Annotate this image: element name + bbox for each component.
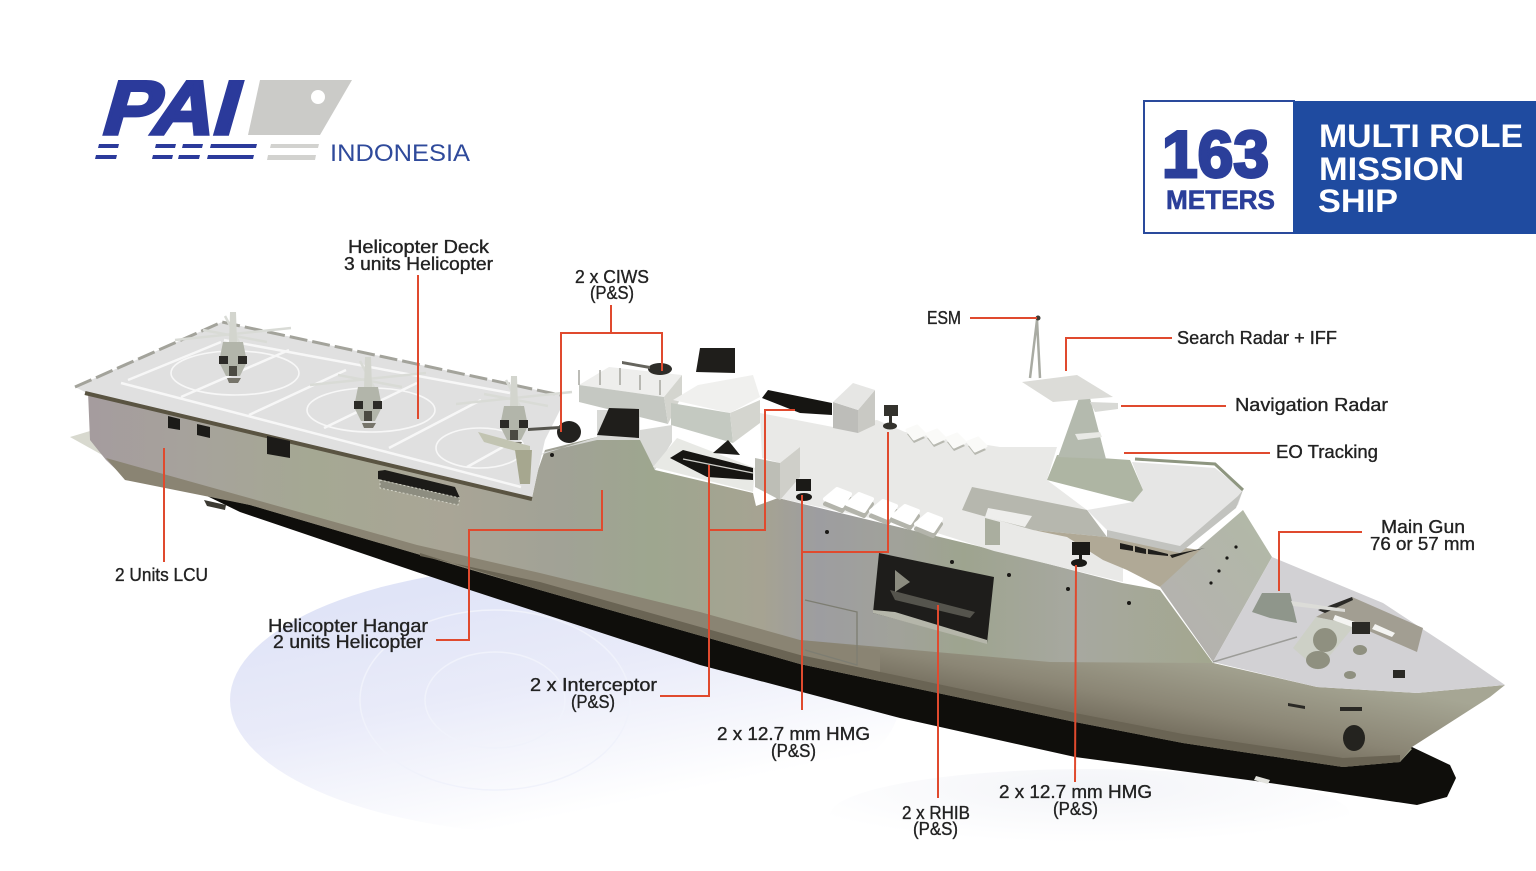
- logo: PAI Indonesia: INDONESIA: [330, 140, 471, 167]
- CIWS block: [579, 367, 682, 424]
- dark director box lower: [597, 408, 639, 438]
- radar mast tower: [1022, 316, 1118, 459]
- callout: helicopter deck: [344, 237, 493, 419]
- main upper deck: [760, 413, 1123, 582]
- callout: CIWS: (P&S): [590, 283, 634, 303]
- callout: HMG forward: 2 x 12.7 mm HMG: [999, 782, 1152, 802]
- callout: ESM: [927, 308, 1037, 328]
- callout: LCU: 2 Units LCU: [115, 565, 208, 585]
- background glow beneath ship: [230, 565, 1350, 861]
- boat row side: [825, 489, 941, 536]
- aft superstructure base: [540, 410, 672, 470]
- callout: LCU: [115, 448, 208, 585]
- dark strip above waterline: [420, 553, 1400, 767]
- helicopter 2: [310, 357, 426, 428]
- gray tower block: [833, 383, 875, 433]
- callout: HMG aft: [717, 432, 888, 761]
- HMG mount aft: [796, 479, 812, 501]
- callout: HMG aft: (P&S): [771, 741, 816, 761]
- callout: helicopter hangar: [268, 490, 602, 652]
- RHIB bay: [873, 553, 994, 644]
- badge: 163 meters, multi role mission ship: METERS: [1166, 185, 1275, 215]
- badge: 163 meters, multi role mission ship: 163: [1162, 117, 1269, 191]
- callout: CIWS: 2 x CIWS: [575, 267, 649, 287]
- bridge deck: [1087, 459, 1243, 558]
- HMG mount forward: [1071, 542, 1090, 567]
- boat row rear: [907, 426, 986, 455]
- logo: PAI Indonesia: [94, 66, 471, 167]
- aft windows: [168, 416, 290, 458]
- callout: main gun: 76 or 57 mm: [1370, 534, 1475, 554]
- stern ramp: [70, 428, 104, 456]
- forward hangar block: [671, 375, 760, 443]
- callout: navigation radar: Navigation Radar: [1235, 395, 1388, 415]
- foredeck anchor well: [1293, 597, 1423, 679]
- callout: helicopter hangar: 2 units Helicopter: [273, 632, 423, 652]
- lower hull band: [106, 458, 880, 681]
- helicopter 3: [456, 376, 572, 484]
- callout: interceptor: 2 x Interceptor: [530, 675, 657, 695]
- side door: [805, 600, 857, 665]
- interceptor bay: [653, 438, 755, 492]
- callout: search radar: [1066, 328, 1337, 371]
- CIWS forward mount: [622, 361, 672, 375]
- HMG mount mid deck: [883, 405, 898, 430]
- bridge lower block: [1047, 455, 1143, 502]
- logo: PAI Indonesia: PAI: [94, 66, 252, 151]
- callout: EO tracking: EO Tracking: [1276, 442, 1378, 462]
- badge: 163 meters, multi role mission ship: MISSION: [1319, 151, 1464, 187]
- callout: helicopter hangar: Helicopter Hangar: [268, 616, 428, 636]
- tall dark director box: [696, 348, 735, 373]
- hull side: [88, 392, 1412, 767]
- callout: main gun: [1279, 517, 1475, 591]
- forward lower hull: [800, 640, 1505, 767]
- forward flare panel: [1160, 510, 1272, 662]
- main gun: [1252, 593, 1345, 623]
- badge: 163 meters, multi role mission ship: [1144, 101, 1536, 234]
- interceptor starboard: [762, 390, 832, 415]
- callout: RHIB: 2 x RHIB: [902, 803, 970, 823]
- interceptor port: [670, 440, 753, 480]
- badge: 163 meters, multi role mission ship: SHIP: [1318, 183, 1398, 219]
- hull portholes: [550, 453, 1238, 605]
- aft underwater fitting: [204, 500, 226, 510]
- callout: helicopter deck: Helicopter Deck: [348, 237, 490, 257]
- helicopter 1: [175, 312, 291, 383]
- callout: HMG forward: (P&S): [1053, 799, 1098, 819]
- foredeck: [1213, 557, 1505, 693]
- callout: interceptor: (P&S): [571, 692, 615, 712]
- small deck block: [755, 447, 800, 500]
- badge: 163 meters, multi role mission ship: MULTI ROLE: [1319, 118, 1523, 154]
- callout: interceptor: [530, 410, 795, 712]
- callout: main gun: Main Gun: [1381, 517, 1465, 537]
- CIWS aft mount: [528, 421, 581, 443]
- callout: HMG forward: [999, 565, 1152, 819]
- flight deck: [75, 322, 560, 497]
- waterline black hull: [205, 495, 1456, 805]
- hull vent: [378, 470, 460, 505]
- flight deck markings: [121, 340, 524, 487]
- bow anchor: [1254, 703, 1365, 784]
- callout: ESM: ESM: [927, 308, 961, 328]
- callout: CIWS: [561, 267, 662, 432]
- midship deck house: [962, 487, 1200, 587]
- callout: RHIB: (P&S): [913, 819, 958, 839]
- callout: search radar: Search Radar + IFF: [1177, 328, 1337, 348]
- callout: HMG aft: 2 x 12.7 mm HMG: [717, 724, 870, 744]
- ship model: [70, 312, 1505, 805]
- callout: RHIB: [902, 605, 970, 839]
- callout: helicopter deck: 3 units Helicopter: [344, 254, 493, 274]
